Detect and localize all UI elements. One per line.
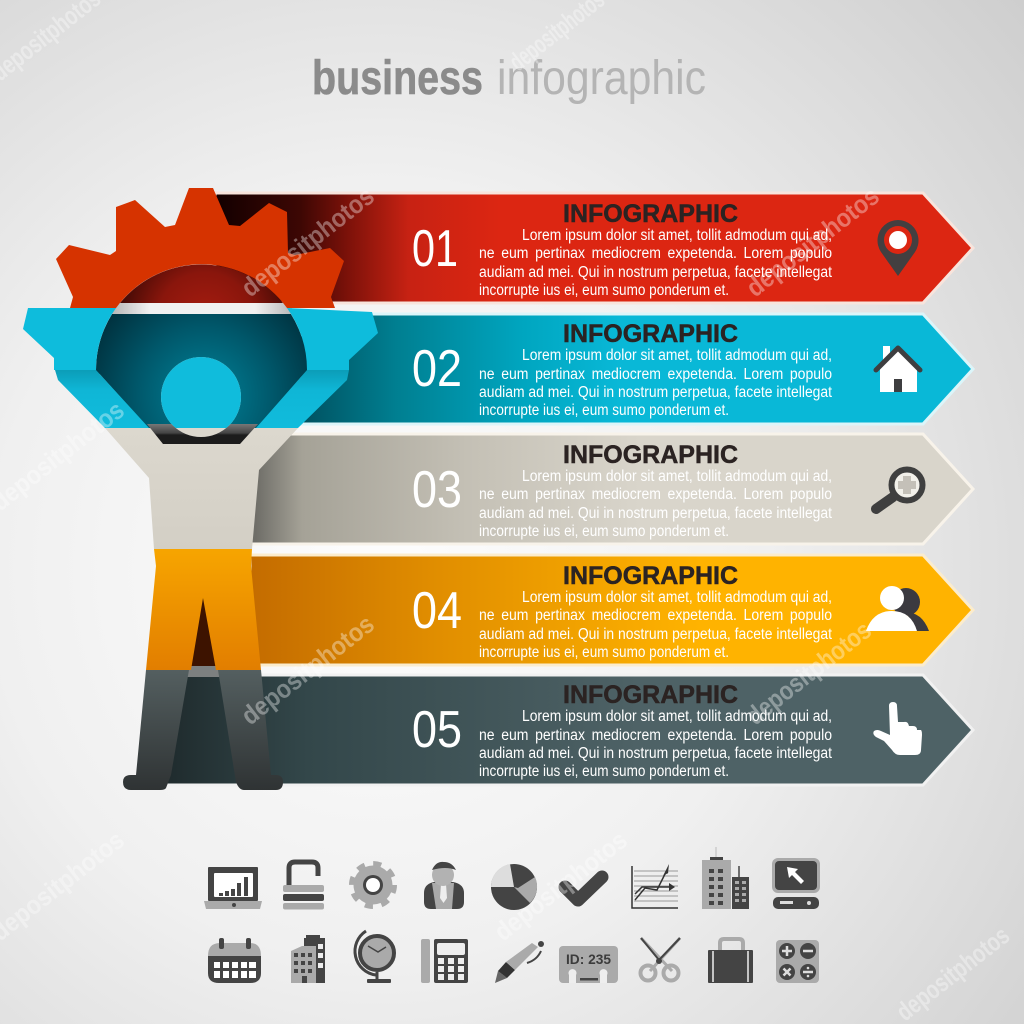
- row 01 text: audiam ad mei. Qui in nostrum perpetua, facete intellegat: [479, 264, 833, 281]
- icon: gear: [352, 864, 394, 906]
- row 04 text: ne eum pertinax mediocrem expetenda. Lorem populo: [479, 607, 832, 624]
- icon: map pin: [878, 220, 918, 276]
- row 02 text: INFOGRAPHIC: [563, 320, 738, 348]
- panel: bar 05 dark: [165, 675, 973, 785]
- icon: businessman: [424, 862, 464, 909]
- row 03 text: [412, 441, 833, 540]
- icon: id card: [559, 946, 618, 983]
- row 03 text: Lorem ipsum dolor sit amet, tollit admodum qui ad,: [522, 468, 832, 485]
- icon: people: [866, 586, 929, 631]
- head: [161, 357, 241, 437]
- row 02 text: ne eum pertinax mediocrem expetenda. Lorem populo: [479, 366, 832, 383]
- row 02 text: Lorem ipsum dolor sit amet, tollit admodum qui ad,: [522, 347, 832, 364]
- icon: briefcase: [708, 939, 753, 983]
- row 02 text: 02: [412, 340, 462, 398]
- row 05 text: 05: [412, 701, 462, 759]
- icon: scissors: [640, 938, 680, 980]
- icon: math symbols: [776, 940, 819, 983]
- row 02 text: audiam ad mei. Qui in nostrum perpetua, facete intellegat: [479, 384, 833, 401]
- row 04 text: audiam ad mei. Qui in nostrum perpetua, facete intellegat: [479, 626, 833, 643]
- icon: calendar: [208, 938, 261, 983]
- icon: pie chart: [491, 864, 537, 910]
- watermarks: depositphotos: [235, 181, 380, 303]
- row 01 text: ne eum pertinax mediocrem expetenda. Lorem populo: [479, 245, 832, 262]
- upper arms: [23, 308, 378, 370]
- icon: line chart: [632, 864, 678, 908]
- icon: pen: [495, 941, 544, 983]
- forearms: [55, 370, 349, 428]
- icon: laptop chart: [204, 867, 262, 909]
- row 04 text: 04: [412, 582, 462, 640]
- row 05 text: [412, 681, 833, 780]
- panel: bar 02 blue: [300, 314, 973, 424]
- icon: calculator: [421, 939, 468, 983]
- neck strip: [147, 424, 258, 444]
- icon: computer cursor: [772, 858, 820, 909]
- panel: bar 04 orange: [250, 555, 973, 665]
- row 01 text: INFOGRAPHIC: [563, 200, 738, 228]
- title: infographic: [497, 52, 706, 105]
- row 01 text: Lorem ipsum dolor sit amet, tollit admodum qui ad,: [522, 227, 832, 244]
- row 05 text: ne eum pertinax mediocrem expetenda. Lorem populo: [479, 727, 832, 744]
- icon: id card: ID: 235: [566, 951, 611, 967]
- title: business: [312, 52, 483, 105]
- row 04 text: INFOGRAPHIC: [563, 562, 738, 590]
- icon: check mark: [565, 877, 602, 900]
- watermarks: depositphotos: [488, 825, 633, 947]
- right leg: [218, 670, 283, 790]
- title: [312, 52, 706, 105]
- icon: globe clock: [355, 931, 394, 983]
- icon: house: [876, 346, 920, 392]
- panel: bar 01 red: [215, 193, 973, 303]
- gray gap strip: [187, 666, 219, 677]
- left leg: [123, 670, 189, 790]
- watermarks: depositphotos: [235, 609, 380, 731]
- row 01 text: 01: [412, 220, 458, 278]
- row 01 text: [412, 200, 833, 299]
- shorts: [146, 549, 261, 670]
- row 03 text: audiam ad mei. Qui in nostrum perpetua, facete intellegat: [479, 505, 833, 522]
- icon: magnifier: [876, 470, 922, 509]
- row 02 text: incorrupte ius ei, eum sumo ponderum et.: [479, 402, 729, 419]
- row 03 text: ne eum pertinax mediocrem expetenda. Lorem populo: [479, 486, 832, 503]
- row 05 text: INFOGRAPHIC: [563, 681, 738, 709]
- row 03 text: INFOGRAPHIC: [563, 441, 738, 469]
- row 05 text: audiam ad mei. Qui in nostrum perpetua, facete intellegat: [479, 745, 833, 762]
- row 02 text: [412, 320, 833, 419]
- figure: person holding gear: [23, 188, 378, 790]
- gear hole: [96, 264, 307, 428]
- crotch gap: [189, 596, 218, 667]
- row 03 text: incorrupte ius ei, eum sumo ponderum et.: [479, 523, 729, 540]
- icon: pointing hand: [873, 702, 922, 755]
- row 03 text: 03: [412, 461, 462, 519]
- icon: apartment building: [291, 935, 325, 983]
- watermarks: depositphotos: [740, 615, 877, 731]
- icon: office buildings: [702, 847, 749, 909]
- row 01 text: incorrupte ius ei, eum sumo ponderum et.: [479, 282, 729, 299]
- gear upper half: [56, 188, 344, 308]
- row 05 text: incorrupte ius ei, eum sumo ponderum et.: [479, 763, 729, 780]
- torso: [105, 428, 298, 549]
- panel: bar 03 beige: [250, 434, 973, 544]
- row 04 text: Lorem ipsum dolor sit amet, tollit admodum qui ad,: [522, 589, 832, 606]
- watermarks: depositphotos: [740, 181, 885, 303]
- row 05 text: Lorem ipsum dolor sit amet, tollit admodum qui ad,: [522, 708, 832, 725]
- row 04 text: incorrupte ius ei, eum sumo ponderum et.: [479, 644, 729, 661]
- icon: open lock: [283, 862, 324, 910]
- row 04 text: [412, 562, 833, 661]
